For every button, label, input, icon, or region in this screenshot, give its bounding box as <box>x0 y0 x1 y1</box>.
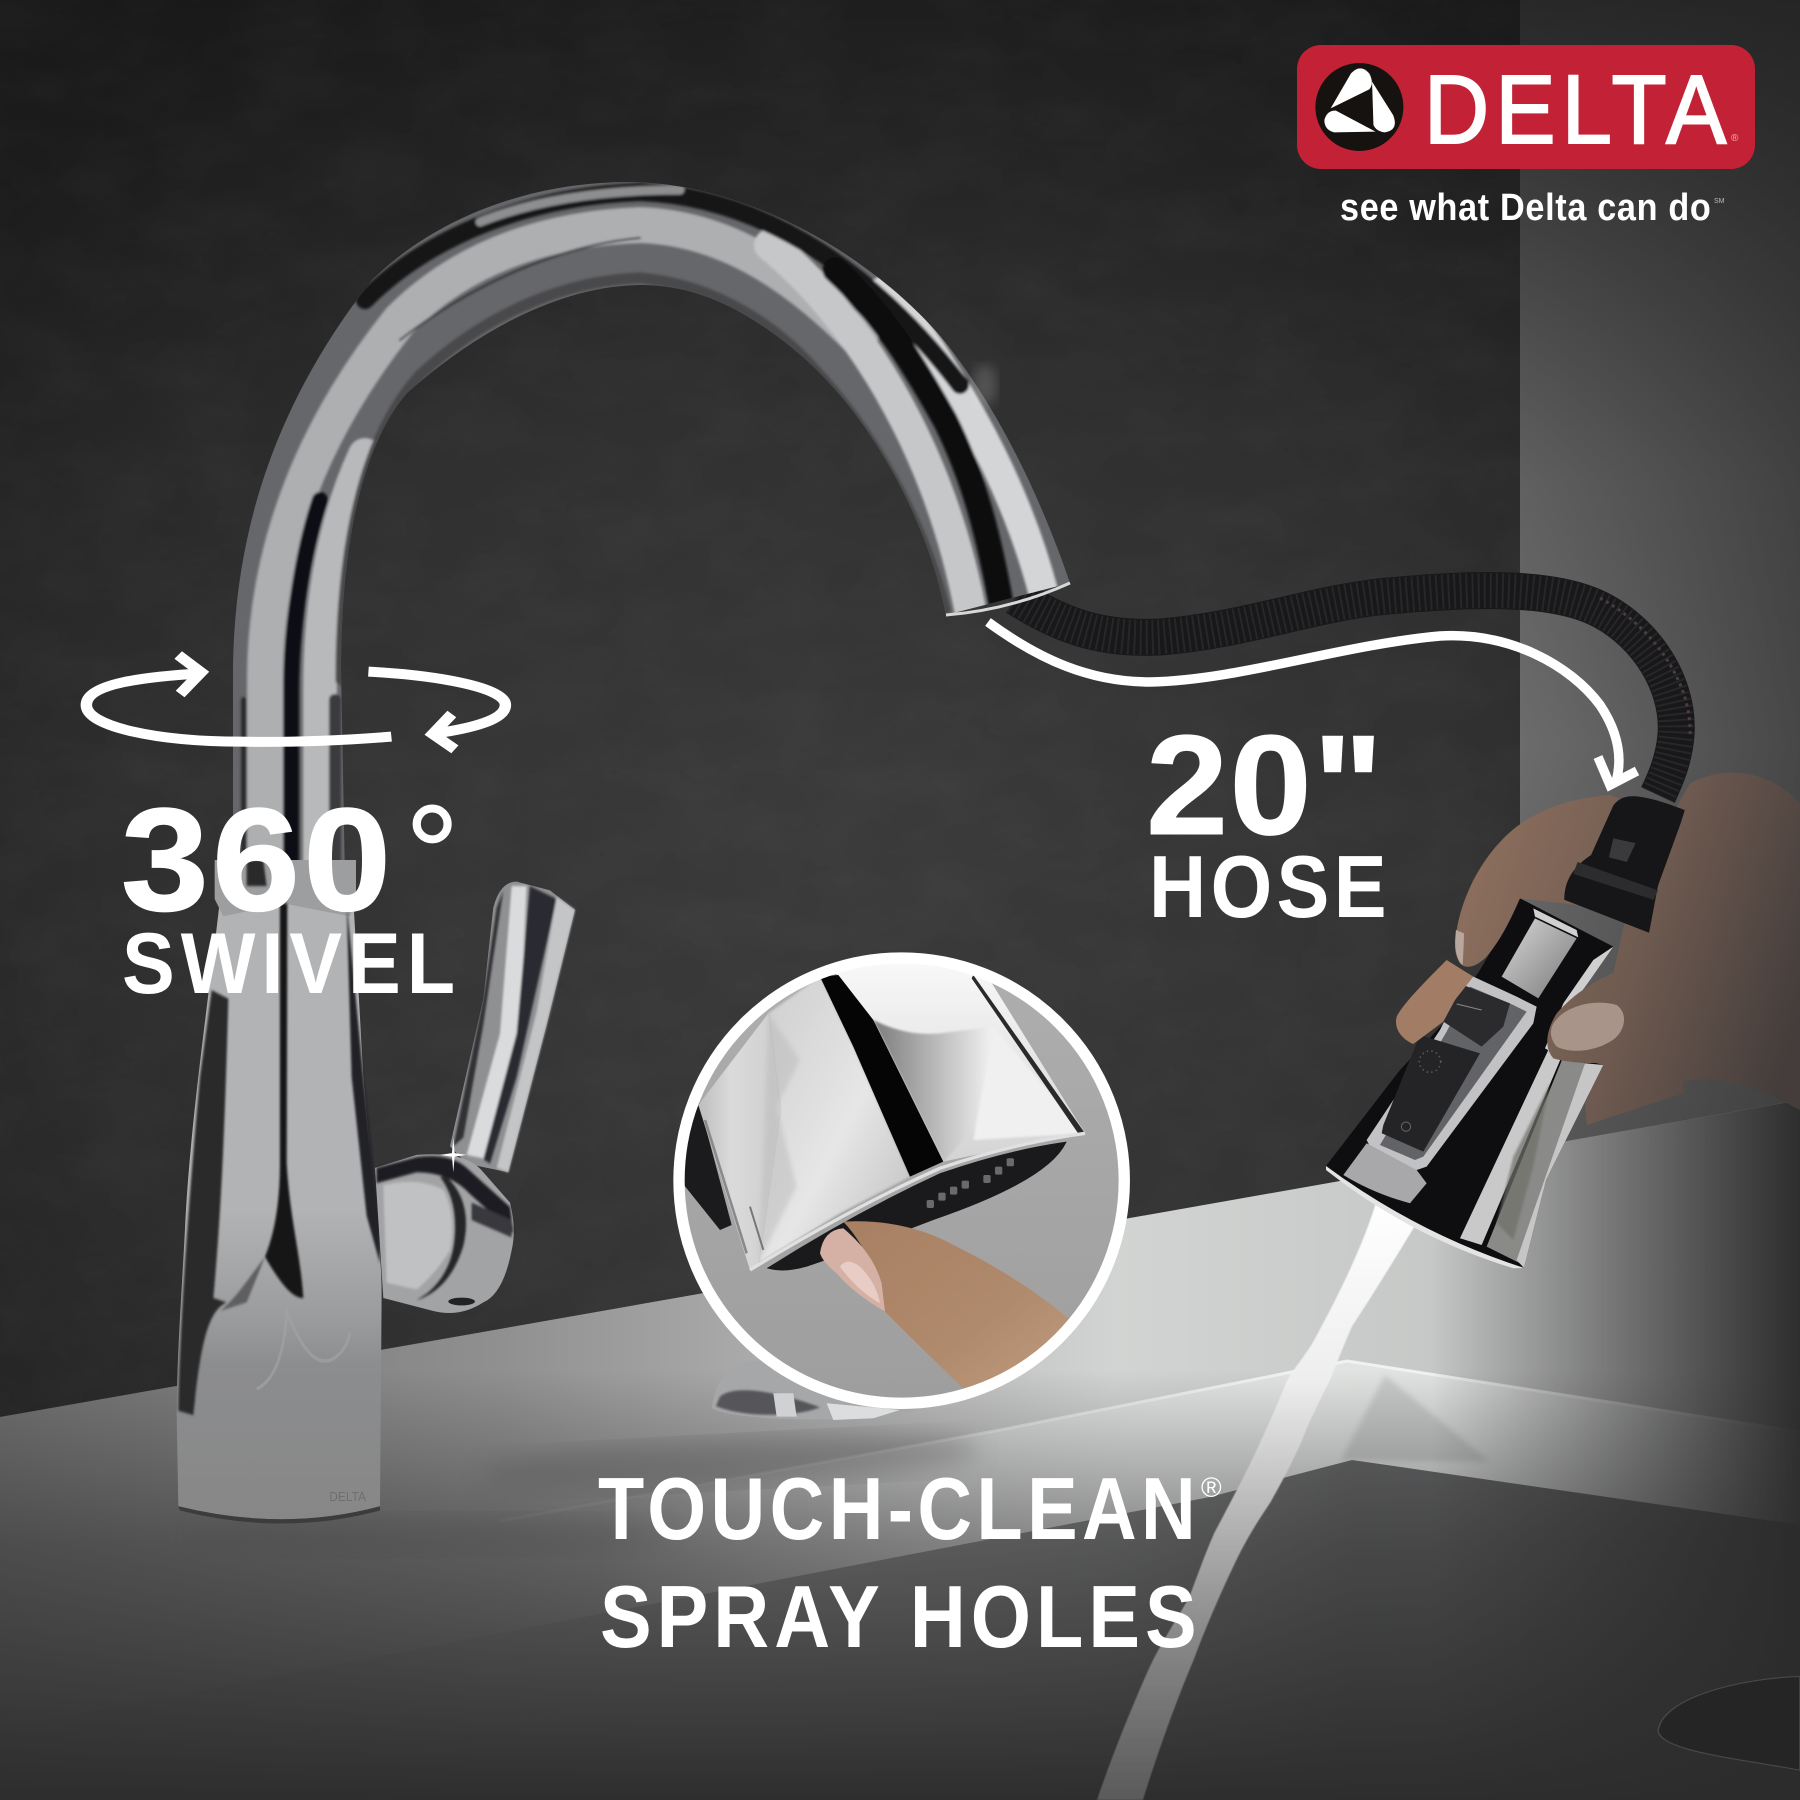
faucet handle <box>375 882 575 1313</box>
spray button <box>1382 1035 1480 1152</box>
thumb <box>1547 950 1683 1063</box>
inset dark handle piece <box>680 1100 732 1230</box>
label: 20 inch hose <box>1146 706 1387 936</box>
faucet spout arc <box>233 182 1070 860</box>
middle finger <box>1396 960 1473 1044</box>
logo badge <box>1297 45 1755 169</box>
hose <box>1016 591 1690 795</box>
lever sparkle <box>440 1138 467 1172</box>
bottom flange <box>1326 1166 1524 1268</box>
head chrome shell <box>1326 898 1613 1268</box>
flange <box>712 1361 920 1420</box>
inset chrome sprayer head <box>698 953 1085 1270</box>
Delta logo <box>1297 45 1755 228</box>
mode button <box>1443 985 1510 1047</box>
inset nozzle opening <box>767 1142 1067 1270</box>
inset finger <box>820 1221 1070 1393</box>
label: touch-clean spray holes <box>598 1461 1222 1666</box>
hand: index finger behind connector <box>1455 795 1653 967</box>
label: touch-clean spray holes: SPRAY HOLES <box>600 1567 1197 1666</box>
hub <box>375 1154 514 1313</box>
label: touch-clean spray holes: ® <box>1201 1472 1222 1503</box>
Delta logo: ® <box>1731 133 1739 144</box>
logo wordmark: DELTA <box>1424 55 1727 164</box>
hand: fingers <box>1396 950 1683 1125</box>
label: 20 inch hose: HOSE <box>1149 837 1387 936</box>
label: touch-clean spray holes: TOUCH-CLEAN <box>598 1461 1196 1558</box>
faucet body <box>177 860 382 1524</box>
water stream <box>1097 1189 1423 1800</box>
button trim <box>1367 977 1537 1170</box>
upper window <box>1502 918 1577 998</box>
lower hand <box>1585 1047 1683 1125</box>
faucet body: DELTA <box>329 1490 366 1504</box>
spray head <box>1326 898 1613 1268</box>
label: 20 inch hose: 20" <box>1146 706 1383 864</box>
swivel rotation arrows <box>86 655 505 749</box>
label: 360 degree swivel: 360 <box>121 778 391 942</box>
body collar <box>215 860 356 916</box>
lever <box>450 882 575 1172</box>
countertop and sink <box>0 1100 1800 1800</box>
tagline: see what Delta can do <box>1340 185 1711 228</box>
panel: touch-clean spray holes inset <box>679 953 1124 1403</box>
label: 360 degree swivel: SWIVEL <box>122 915 455 1012</box>
label: 360 degree swivel <box>121 777 459 1012</box>
label: 360 degree swivel: ° <box>405 777 459 929</box>
connector <box>1564 796 1685 933</box>
icon: drain <box>1658 1676 1800 1770</box>
hose length arrow <box>988 622 1637 785</box>
Delta logo: SM <box>1714 198 1725 205</box>
spout sparkle <box>973 365 997 405</box>
hand: back of palm <box>1587 773 1800 1125</box>
logo emblem <box>1315 63 1403 151</box>
lower right chrome strips <box>1460 1050 1603 1268</box>
